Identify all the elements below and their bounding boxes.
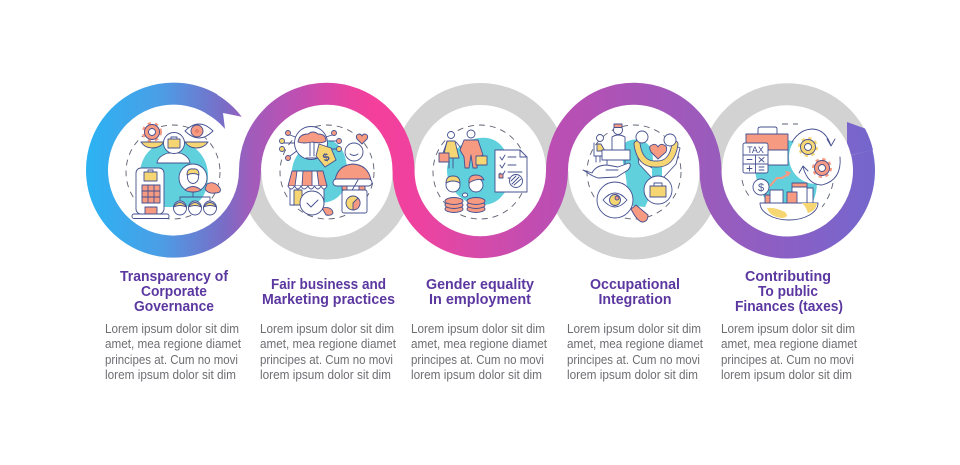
text block: contributing [721,269,857,382]
text block: gender equality [411,277,547,382]
text block: occupational integration [567,277,703,382]
text block: occupational integration: lorem ipsum dolor sit dim [567,368,698,382]
text block: occupational integration: Occupational [590,277,680,293]
text block: fair business [260,277,396,382]
text block: fair business: Marketing practices [262,292,395,308]
text block: fair business: Lorem ipsum dolor sit dim [260,322,394,336]
text block: contributing: principes at. Cum no movi [721,353,854,367]
text block: fair business: principes at. Cum no movi [260,353,393,367]
text block: gender equality: lorem ipsum dolor sit dim [411,368,542,382]
text block: transparency: amet, mea regione diamet [105,337,241,351]
gradient wave ribbon with arrow [97,94,873,247]
text block: occupational integration: Lorem ipsum dolor sit dim [567,322,701,336]
text block: fair business: Fair business and [271,277,386,293]
text block: transparency: lorem ipsum dolor sit dim [105,368,236,382]
icon: fair business: $ [321,151,331,165]
text block: gender equality: principes at. Cum no movi [411,353,544,367]
text block: gender equality: Lorem ipsum dolor sit dim [411,322,545,336]
icon: contributing taxes: TAX [747,145,764,155]
icon: fair business [280,125,374,219]
icon: gender equality [433,125,527,219]
text block: gender equality: In employment [429,292,531,308]
gray ring arcs [250,94,862,249]
text block: contributing: To public [758,284,818,300]
text block: contributing: Finances (taxes) [735,299,843,315]
icon: contributing taxes [742,124,843,220]
text block: transparency [105,269,241,382]
icon: occupational integration [583,124,681,222]
text block: transparency: Corporate [141,284,207,300]
text block: transparency: principes at. Cum no movi [105,353,238,367]
text block: transparency: Transparency of [120,269,228,285]
icon: corporate governance [126,124,220,219]
text block: gender equality: amet, mea regione diamet [411,337,547,351]
text block: contributing: amet, mea regione diamet [721,337,857,351]
text block: occupational integration: amet, mea regione diamet [567,337,703,351]
text block: transparency: Governance [134,299,214,315]
text block: occupational integration: principes at. Cum no movi [567,353,700,367]
text block: gender equality: Gender equality [426,277,534,293]
text block: transparency: Lorem ipsum dolor sit dim [105,322,239,336]
icon: contributing taxes: $ [758,182,764,194]
text block: contributing: Lorem ipsum dolor sit dim [721,322,855,336]
text block: occupational integration: Integration [598,292,672,308]
text block: fair business: amet, mea regione diamet [260,337,396,351]
text block: contributing: lorem ipsum dolor sit dim [721,368,852,382]
text block: fair business: lorem ipsum dolor sit dim [260,368,391,382]
text block: contributing: Contributing [745,269,831,285]
